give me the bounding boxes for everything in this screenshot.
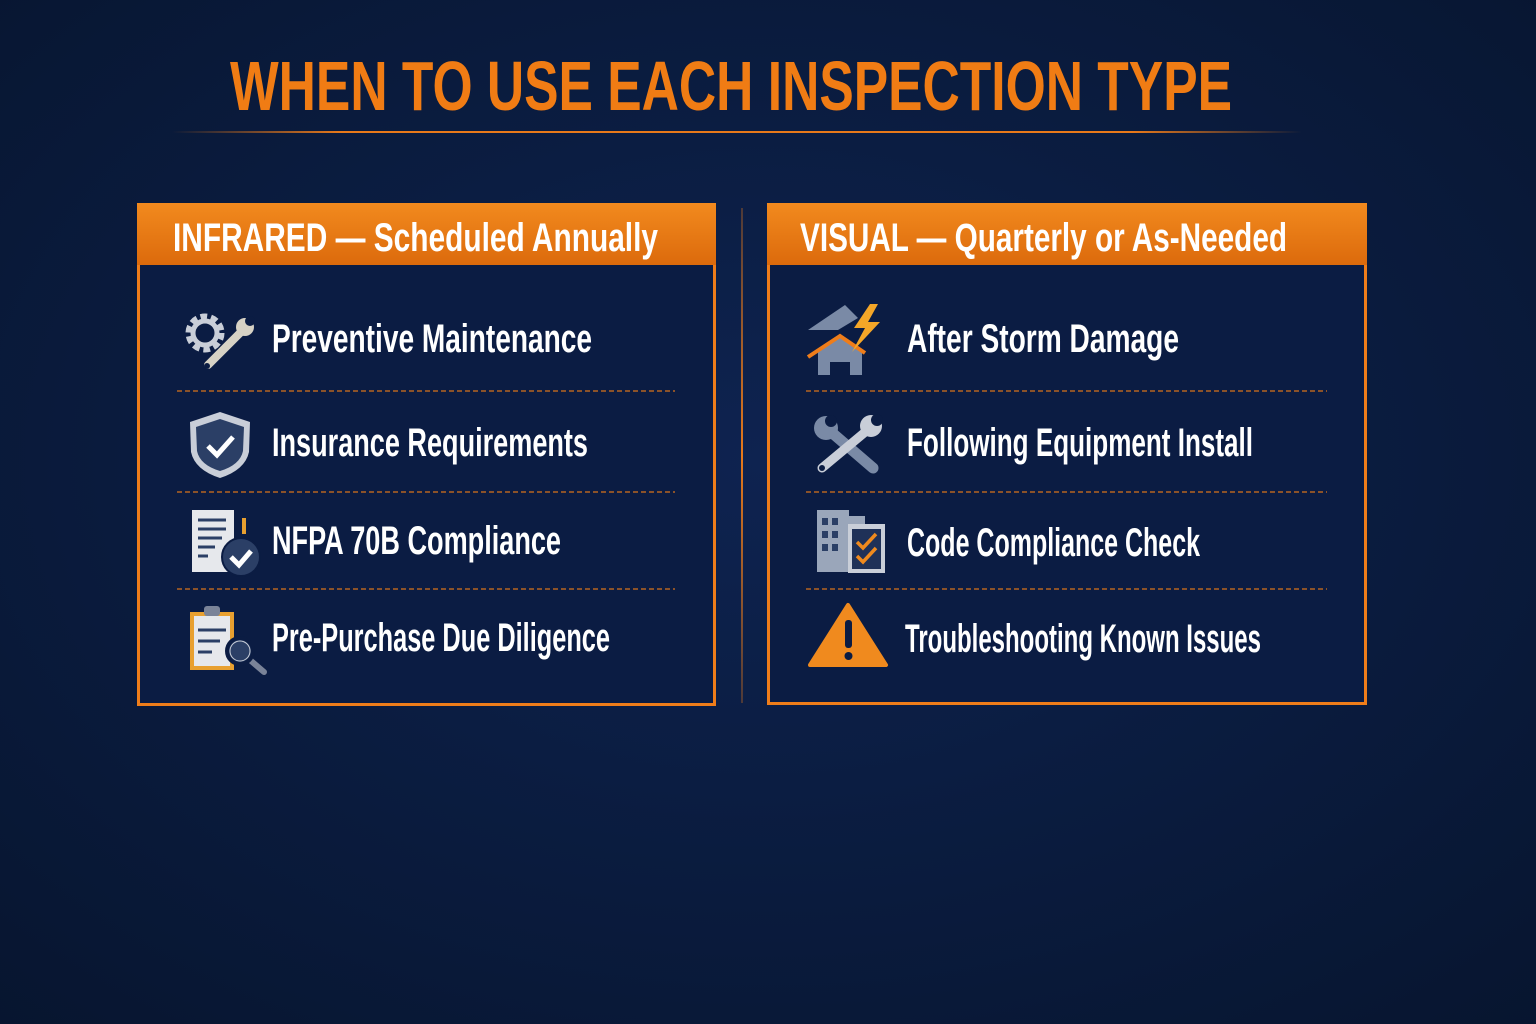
icon: clipboard magnifier bbox=[190, 606, 264, 672]
icon: tools bbox=[814, 414, 883, 471]
item: troubleshooting: Troubleshooting Known Issues bbox=[905, 617, 1261, 661]
icon: storm house bbox=[808, 304, 880, 375]
panel header: infrared: INFRARED — Scheduled Annually bbox=[173, 216, 659, 260]
icon: gear and wrench bbox=[190, 316, 255, 369]
panel header: infrared bbox=[137, 203, 716, 265]
panel header: visual: VISUAL — Quarterly or As-Needed bbox=[800, 216, 1287, 260]
panel: visual bbox=[767, 203, 1367, 704]
item: insurance: Insurance Requirements bbox=[272, 421, 588, 465]
item: code: Code Compliance Check bbox=[907, 521, 1200, 565]
icon: warning bbox=[810, 605, 886, 665]
item: nfpa: NFPA 70B Compliance bbox=[272, 519, 561, 563]
item: preventive maintenance: Preventive Maintenance bbox=[272, 317, 592, 361]
panel header: visual bbox=[767, 203, 1367, 265]
icon: shield bbox=[190, 412, 250, 478]
panel: infrared bbox=[137, 203, 716, 704]
item: pre-purchase: Pre-Purchase Due Diligence bbox=[272, 616, 610, 660]
icon: document check bbox=[192, 510, 260, 576]
item: storm: After Storm Damage bbox=[907, 317, 1179, 361]
item: equipment: Following Equipment Install bbox=[907, 421, 1253, 465]
icon: building checklist bbox=[817, 510, 885, 573]
